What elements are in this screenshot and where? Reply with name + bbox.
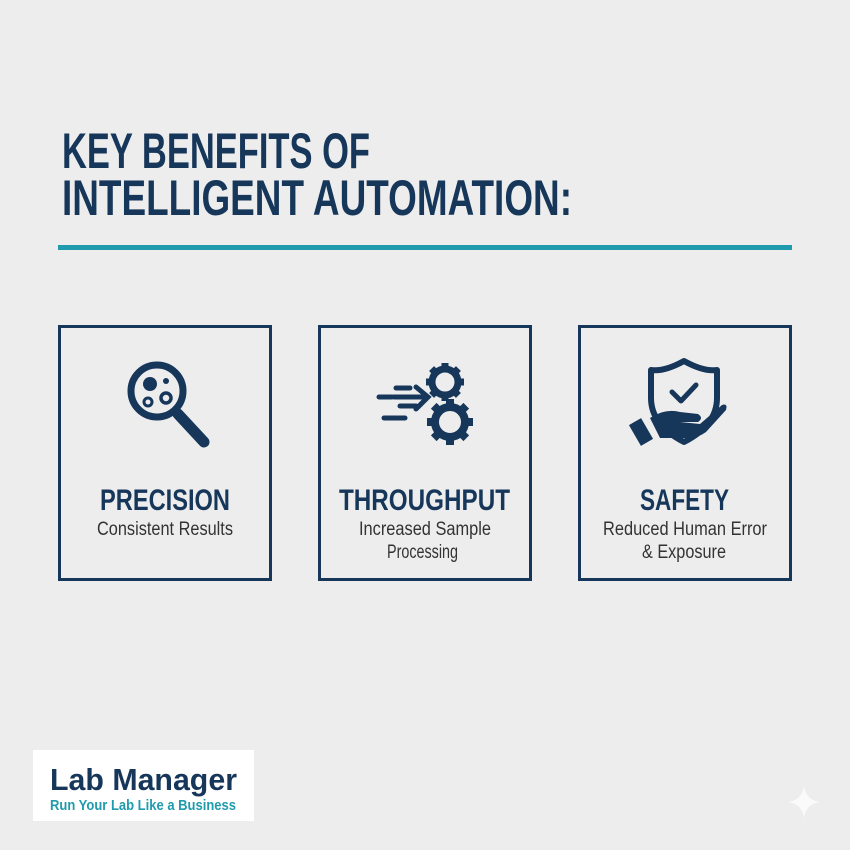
title: KEY BENEFITS OF	[62, 123, 370, 179]
text: throughput: Increased Sample	[359, 519, 491, 540]
icon: shield with hand	[629, 361, 726, 446]
heading: precision: PRECISION	[100, 484, 230, 517]
heading: throughput: THROUGHPUT	[339, 484, 510, 517]
title	[62, 123, 572, 226]
icon: gears	[379, 363, 473, 445]
logo	[33, 750, 254, 821]
text: throughput	[359, 519, 491, 563]
text: safety	[603, 519, 768, 563]
icon: sparkle	[788, 786, 820, 818]
text: throughput: Processing	[387, 542, 458, 563]
panel: safety	[580, 326, 790, 580]
text: safety: & Exposure	[642, 542, 726, 563]
text: precision: Consistent Results	[97, 519, 233, 540]
icon: magnifier	[131, 365, 204, 442]
logo: Run Your Lab Like a Business	[50, 797, 236, 814]
panel: throughput	[320, 326, 530, 580]
heading: safety: SAFETY	[640, 484, 729, 517]
title: INTELLIGENT AUTOMATION:	[62, 170, 572, 226]
logo: Lab Manager	[50, 762, 237, 797]
panel: precision	[60, 326, 270, 580]
text: safety: Reduced Human Error	[603, 519, 768, 540]
